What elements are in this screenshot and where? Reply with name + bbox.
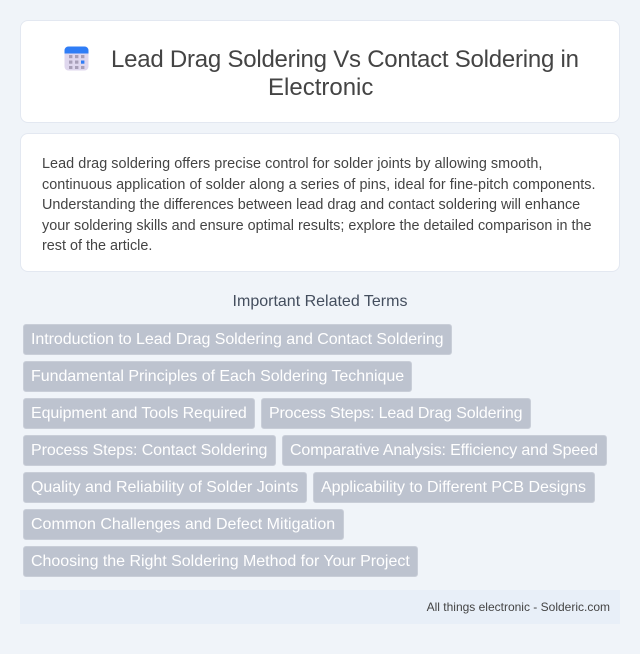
chip: equipment and tools	[23, 398, 255, 429]
text block: introduction: Lead drag soldering offers precise control for solder joints by allowing smooth,	[42, 156, 542, 172]
text block: introduction: your soldering skills and ensure optimal results; explore the detailed comparison in the	[42, 218, 592, 234]
chip: lead drag process steps: Process Steps: Lead Drag Soldering	[269, 405, 522, 422]
footer bar	[20, 590, 620, 624]
chip: applicability: Applicability to Different PCB Designs	[321, 479, 586, 496]
chip: comparative analysis	[282, 435, 607, 466]
text block: introduction: Understanding the differences between lead drag and contact soldering will enhance	[42, 197, 580, 213]
chip: common challenges	[23, 509, 344, 540]
chip: fundamental principles	[23, 361, 412, 392]
chip: comparative analysis: Comparative Analysis: Efficiency and Speed	[290, 442, 598, 459]
chip: quality and reliability	[23, 472, 307, 503]
panel: related terms chips	[23, 324, 607, 577]
text block: introduction	[42, 156, 596, 254]
panel: header card	[20, 20, 620, 123]
chip: choosing method	[23, 546, 418, 577]
chip: applicability	[313, 472, 595, 503]
chip: quality and reliability: Quality and Reliability of Solder Joints	[31, 479, 298, 496]
chip: contact process steps: Process Steps: Contact Soldering	[31, 442, 267, 459]
chip: common challenges: Common Challenges and Defect Mitigation	[31, 516, 335, 533]
text block: introduction: continuous application of solder along a series of pins, ideal for fine-pitch components.	[42, 177, 596, 193]
chip: fundamental principles: Fundamental Principles of Each Soldering Technique	[31, 368, 404, 385]
footer text: All things electronic - Solderic.com	[427, 600, 610, 614]
panel: introduction card	[20, 133, 620, 272]
chip: lead drag process steps	[261, 398, 531, 429]
chip: introduction: Introduction to Lead Drag Soldering and Contact Soldering	[31, 331, 444, 348]
chip: contact process steps	[23, 435, 276, 466]
title: Electronic	[268, 74, 373, 101]
chip: introduction	[23, 324, 452, 355]
title: Lead Drag Soldering Vs Contact Soldering in	[111, 46, 579, 73]
heading: important related terms: Important Related Terms	[233, 293, 407, 310]
chip: choosing method: Choosing the Right Soldering Method for Your Project	[31, 553, 410, 570]
title	[111, 46, 579, 101]
chip: equipment and tools: Equipment and Tools Required	[31, 405, 247, 422]
text block: introduction: rest of the article.	[42, 238, 152, 254]
icon: calendar	[64, 46, 88, 70]
